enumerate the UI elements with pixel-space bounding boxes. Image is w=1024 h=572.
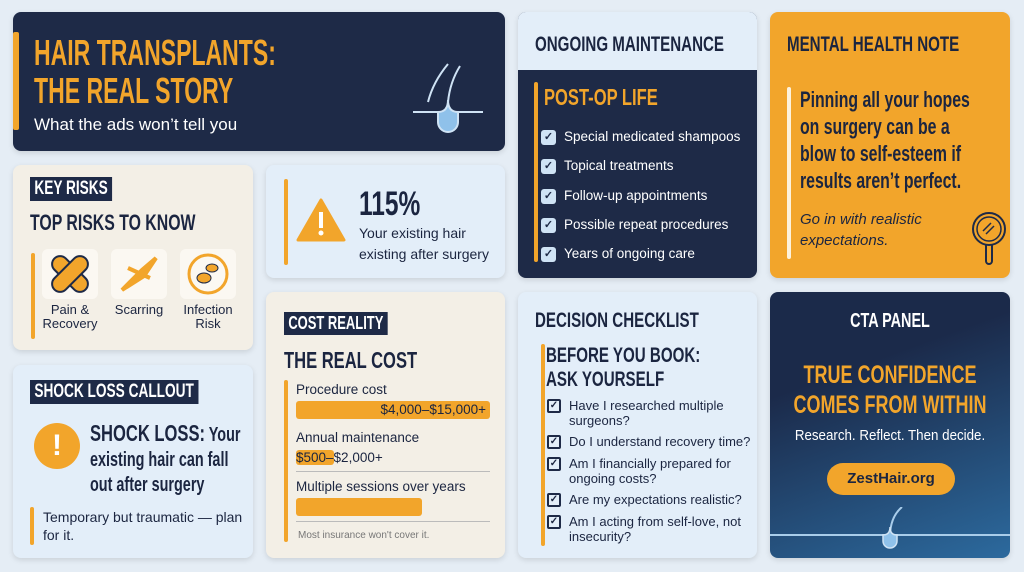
title [34, 32, 276, 111]
button [827, 463, 955, 495]
panel: cost [266, 292, 505, 558]
subheading: ASK YOURSELF [546, 368, 664, 391]
note: Go in with realistic [800, 211, 922, 228]
checklist: Are my expectations realistic? [569, 492, 742, 507]
subtitle: What the ads won’t tell you [34, 115, 237, 134]
icon: exclamation: ! [52, 429, 62, 462]
checklist: Years of ongoing care [564, 246, 695, 261]
checklist [541, 129, 740, 262]
heading: CTA PANEL [850, 310, 930, 332]
headline: COMES FROM WITHIN [794, 391, 986, 419]
heading: ONGOING MAINTENANCE [535, 33, 724, 56]
cost bar chart: Most insurance won't cover it. [298, 530, 429, 541]
checklist: ✓ [550, 436, 558, 447]
panel: key risks [13, 165, 253, 350]
tagline: Research. Reflect. Then decide. [795, 428, 985, 444]
note [800, 211, 922, 249]
icon: infection [180, 249, 236, 331]
panel: mental health [770, 12, 1010, 278]
checklist: Topical treatments [564, 158, 674, 173]
cost bar chart: $500–$2,000+ [296, 450, 383, 465]
checklist: Am I acting from self-love, not insecurity? [569, 514, 741, 544]
icon: bandage [42, 249, 98, 331]
panel: shock loss [13, 365, 253, 558]
checklist: Follow-up appointments [564, 188, 707, 203]
panel: decision checklist [518, 292, 757, 558]
headline [794, 361, 986, 419]
panel: title [13, 12, 505, 151]
button: ZestHair.org [847, 470, 935, 487]
subheading: BEFORE YOU BOOK: [546, 344, 700, 367]
note: Temporary but traumatic — plan for it. [43, 509, 242, 543]
heading: THE REAL COST [284, 347, 417, 373]
checklist: Do I understand recovery time? [569, 434, 750, 449]
icon: hair follicle [413, 63, 483, 133]
panel: 115% stat [266, 165, 505, 278]
stat text [359, 225, 489, 262]
icon: follicle [770, 507, 1010, 549]
checklist: ✓ [544, 190, 553, 202]
panel: ongoing maintenance [518, 12, 757, 278]
checklist: ✓ [544, 219, 553, 231]
icon: infection: Risk [195, 316, 221, 331]
tag: COST REALITY [288, 313, 383, 333]
stat: 115% [359, 185, 420, 223]
cost bar chart [296, 382, 490, 541]
checklist: ✓ [544, 131, 553, 143]
icon: bandage: Recovery [43, 316, 97, 331]
icon: scarring: Scarring [115, 302, 163, 317]
quote: Pinning all your hopes on surgery can be a blow to self-esteem if results aren’t perfect. [800, 87, 970, 193]
tag: SHOCK LOSS CALLOUT [34, 381, 194, 402]
checklist [547, 398, 750, 544]
stat text: existing after surgery [359, 246, 489, 262]
title: THE REAL STORY [34, 70, 233, 111]
checklist: Special medicated shampoos [564, 129, 740, 144]
stat text: Your existing hair [359, 225, 466, 241]
checklist: ✓ [550, 400, 558, 411]
icon: infection: Infection [183, 302, 233, 317]
heading: TOP RISKS TO KNOW [30, 210, 195, 235]
cost bar chart: Multiple sessions over years [296, 479, 466, 494]
cost bar chart: Procedure cost [296, 382, 387, 397]
panel: CTA [770, 292, 1010, 558]
checklist: Have I researched multiple surgeons? [569, 398, 724, 428]
checklist: ✓ [544, 160, 553, 172]
icon: exclamation [34, 423, 80, 469]
checklist: Possible repeat procedures [564, 217, 728, 232]
icon: mirror [972, 212, 1006, 265]
icon: bandage: Pain & [51, 302, 89, 317]
checklist: ✓ [550, 516, 558, 527]
shock loss text: SHOCK LOSS: Your existing hair can fall out after surgery [90, 420, 240, 496]
tag: key risks: KEY RISKS [34, 178, 108, 199]
icon: scarring [111, 249, 167, 317]
title: HAIR TRANSPLANTS: [34, 32, 276, 73]
icon: warning [296, 198, 346, 242]
cost bar chart: $4,000–$15,000+ [381, 402, 486, 417]
note: expectations. [800, 232, 888, 249]
checklist: ✓ [550, 494, 558, 505]
subheading: POST-OP LIFE [544, 84, 658, 110]
checklist: Am I financially prepared for ongoing costs? [569, 456, 731, 486]
headline: TRUE CONFIDENCE [803, 361, 977, 389]
cost bar chart: Annual maintenance [296, 430, 419, 445]
subheading [546, 344, 700, 391]
heading: MENTAL HEALTH NOTE [787, 33, 959, 56]
heading: DECISION CHECKLIST [535, 309, 699, 332]
checklist: ✓ [544, 248, 553, 260]
checklist: ✓ [550, 458, 558, 469]
